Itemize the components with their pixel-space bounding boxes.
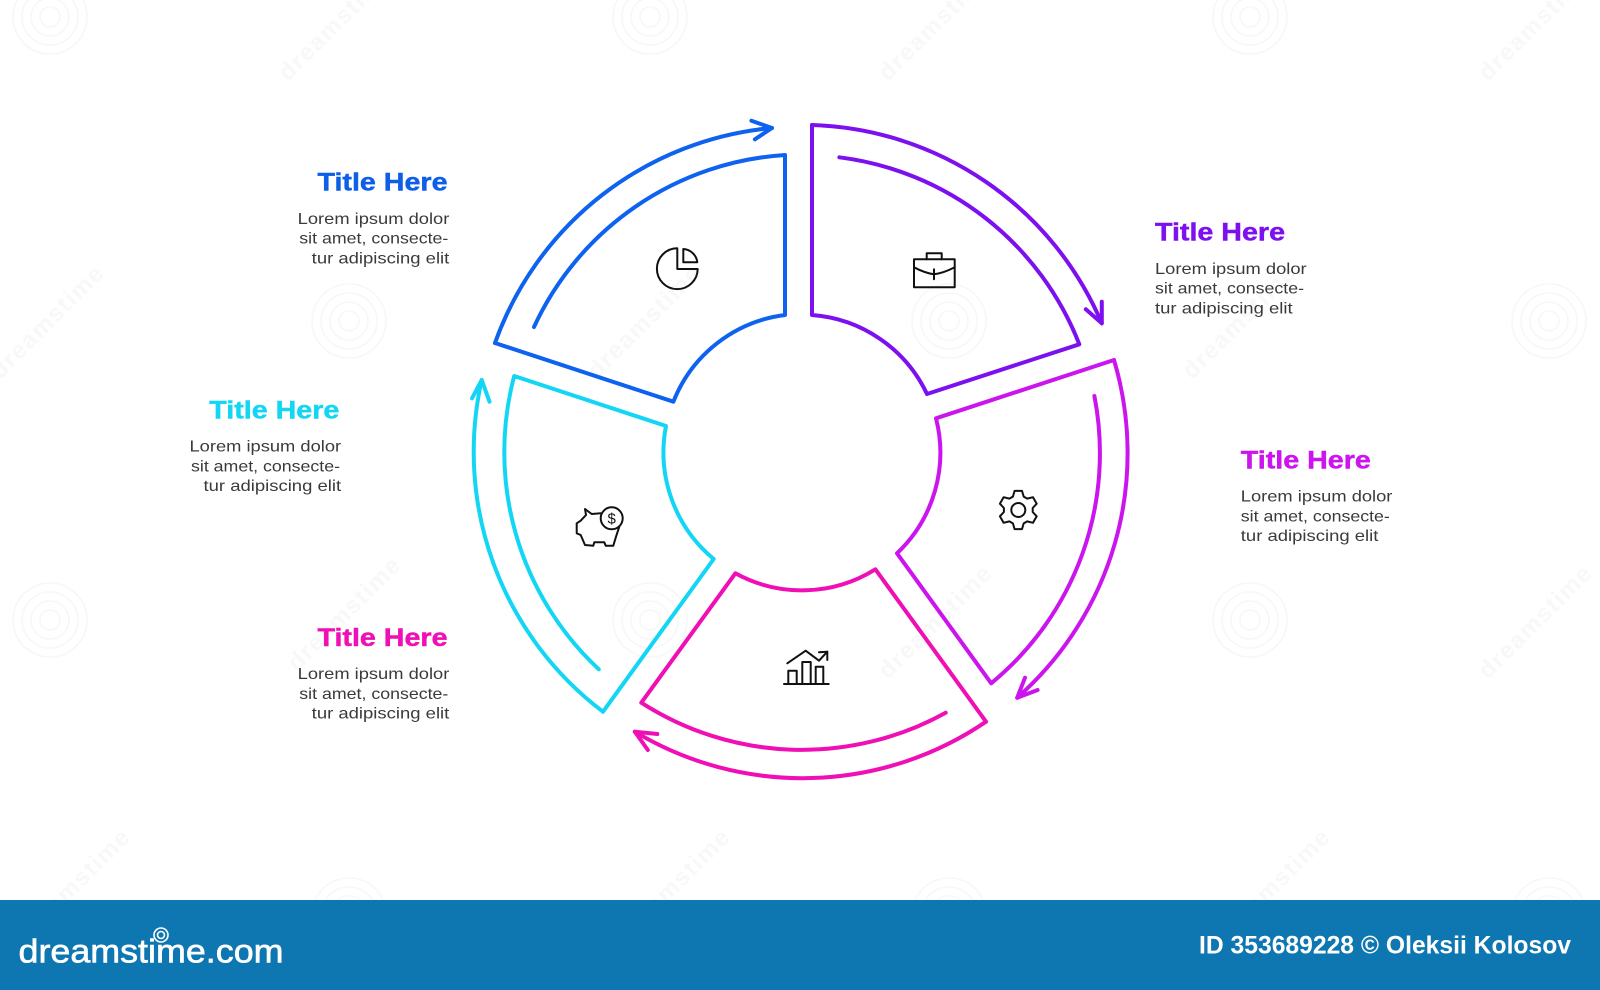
text block: purple: tur adipiscing elit [1155,300,1293,317]
segment: purple with arrow [812,125,1102,394]
footer credit: ID 353689228 © Oleksii Kolosov [1199,931,1571,959]
watermark pattern: dreamstime [582,259,707,384]
text block: pink: Lorem ipsum dolor [298,666,450,683]
segment: cyan with arrow [472,376,714,712]
text block: blue: sit amet, consecte- [299,231,448,248]
text block: blue: tur adipiscing elit [312,250,450,267]
footer logo spiral [154,928,168,942]
watermark pattern: dreamstime [1211,823,1336,948]
text block: magenta [1241,446,1393,545]
watermark pattern: dreamstime [1473,559,1598,684]
icon: piggy bank [577,507,623,546]
segment: blue with arrow [495,121,785,402]
text block: cyan: Title Here [209,396,339,424]
icon: pie chart [657,248,698,289]
text block: purple: Title Here [1155,219,1285,247]
text block: purple [1155,219,1307,317]
text block: blue: Title Here [318,169,448,197]
watermark pattern: dreamstime [282,551,407,676]
icon: gear [1000,491,1037,529]
watermark pattern: dreamstime [11,823,136,948]
segment: pink with arrow [635,569,986,778]
watermark pattern: dreamstime [611,823,736,948]
text block: pink: sit amet, consecte- [299,686,448,703]
text block: magenta: Lorem ipsum dolor [1241,489,1393,506]
text block: blue [298,169,450,267]
icon: growth chart [784,651,829,684]
icon: piggy bank: $ [608,510,617,528]
icon: briefcase [914,253,955,287]
text block: pink: Title Here [318,624,448,652]
watermark pattern: dreamstime [1177,259,1302,384]
footer banner [0,900,1600,990]
text block: magenta: Title Here [1241,446,1371,474]
text block: purple: Lorem ipsum dolor [1155,261,1307,278]
text block: blue: Lorem ipsum dolor [298,211,450,228]
text block: cyan [190,396,342,495]
text block: cyan: tur adipiscing elit [204,478,342,495]
text block: magenta: sit amet, consecte- [1241,508,1390,525]
watermark pattern: dreamstime [873,559,998,684]
text block: magenta: tur adipiscing elit [1241,528,1379,545]
text block: purple: sit amet, consecte- [1155,281,1304,298]
text block: pink [298,624,450,722]
text block: cyan: Lorem ipsum dolor [190,439,342,456]
text block: cyan: sit amet, consecte- [191,458,340,475]
text block: pink: tur adipiscing elit [312,705,450,722]
footer logo text: dreamstime.com [18,932,284,970]
segment: magenta with arrow [897,360,1128,698]
